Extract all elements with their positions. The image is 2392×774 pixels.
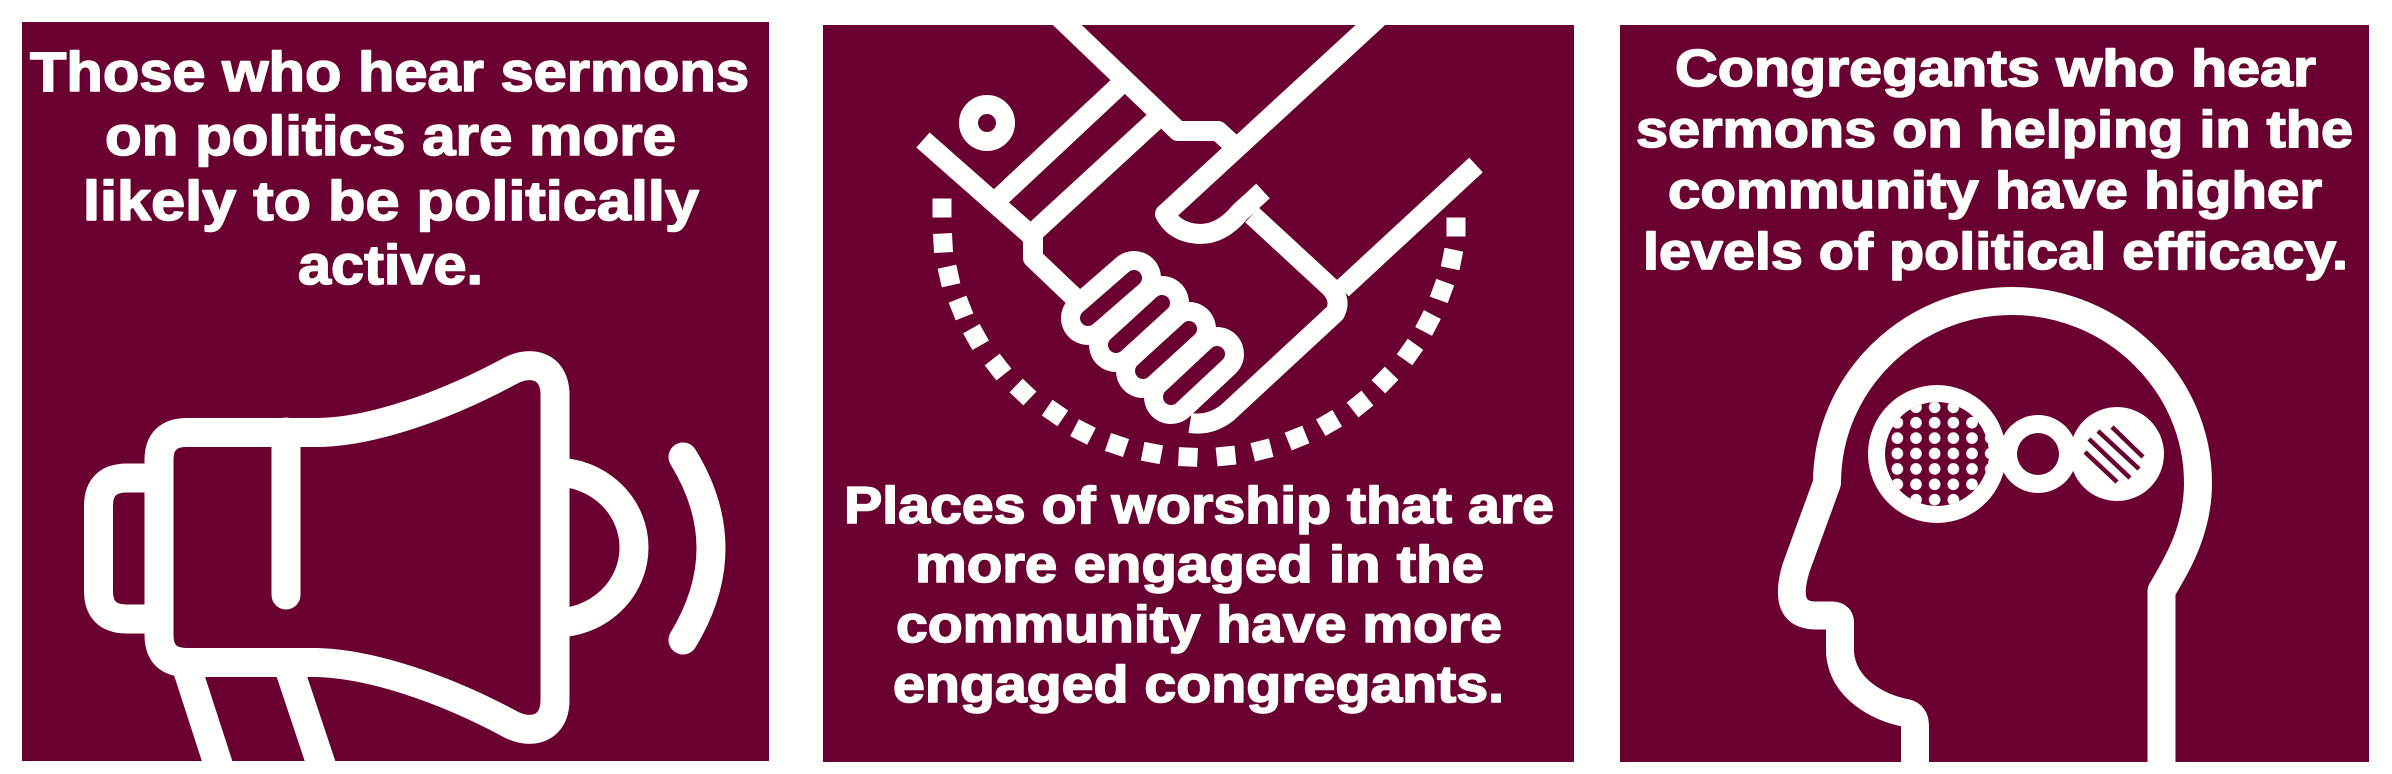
heading: political efficacy: levels of political efficacy. [1643,223,2348,281]
heading: politics sermons [30,40,749,296]
heading: community engagement: engaged congregants. [893,656,1504,714]
heading: community engagement: community have more [896,596,1502,654]
heading: politics sermons: likely to be politically [83,169,699,232]
heading: community engagement [844,477,1554,714]
heading: politics sermons: Those who hear sermons [30,40,749,103]
icon: dotted arc [932,198,1466,467]
panel: politics sermons [22,22,769,770]
heading: political efficacy: Congregants who hear [1675,40,2316,98]
panel: community engagement [823,18,1574,762]
heading: political efficacy: sermons on helping in the [1636,101,2353,159]
icon: megaphone [98,366,711,770]
heading: politics sermons: active. [298,233,483,296]
panel 2 background [823,25,1574,762]
heading: community engagement: Places of worship that are [844,477,1554,535]
panel 3 background [1620,25,2369,762]
heading: community engagement: more engaged in the [915,536,1484,594]
heading: political efficacy [1636,40,2353,281]
icon: head with brain circles [1792,301,2198,770]
heading: politics sermons: on politics are more [105,104,676,167]
panel: political efficacy [1620,25,2369,770]
panel 1 background [22,22,769,761]
icon: handshake [923,18,1476,424]
brain circles [1868,385,2164,523]
heading: political efficacy: community have higher [1668,162,2322,220]
head outline [1792,301,2198,770]
